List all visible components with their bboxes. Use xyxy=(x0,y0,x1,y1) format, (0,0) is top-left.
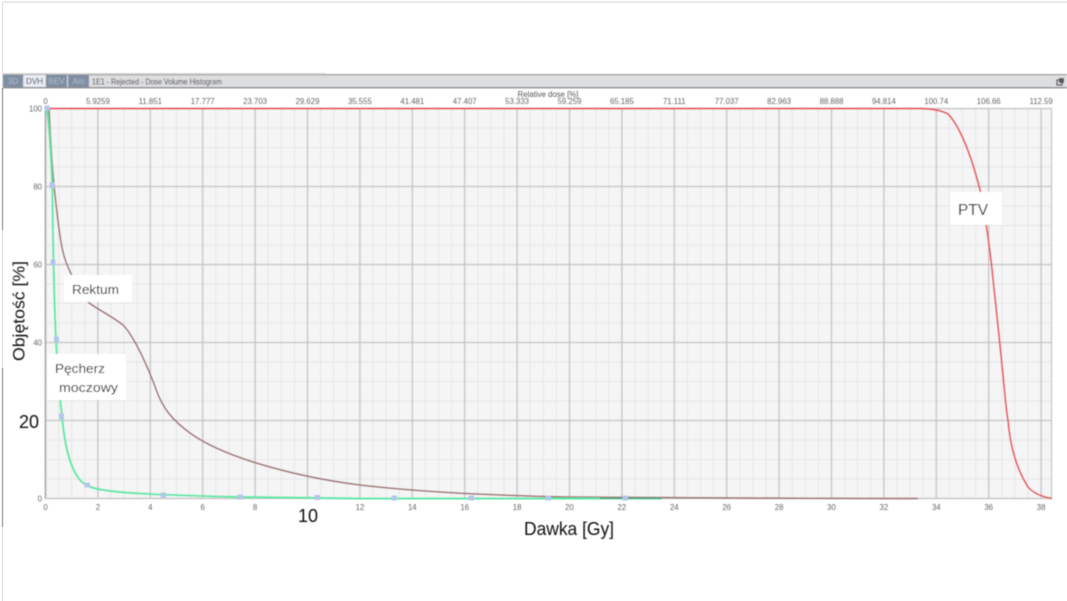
bottom axis labels: 24 xyxy=(670,503,679,512)
bottom axis labels: 34 xyxy=(932,503,941,512)
window title bar xyxy=(3,74,1067,88)
bottom axis labels xyxy=(43,503,1045,512)
top axis labels: 100.74 xyxy=(924,97,949,106)
bladder curve dark end segment xyxy=(600,498,662,500)
top axis labels: 47.407 xyxy=(453,97,477,106)
top axis labels: 94.814 xyxy=(872,97,896,106)
bottom axis labels: 18 xyxy=(513,503,521,512)
rectum label: Rektum xyxy=(72,282,119,297)
top axis labels: 0 xyxy=(43,97,48,106)
bladder curve markers xyxy=(44,106,628,500)
bottom axis labels: 20 xyxy=(565,503,574,512)
window title bar: DVH xyxy=(26,77,43,86)
bottom axis labels: 28 xyxy=(775,503,783,512)
bottom axis labels: 30 xyxy=(827,503,836,512)
bottom axis labels: 16 xyxy=(460,503,469,512)
window title bar: BEV xyxy=(48,77,65,86)
top axis labels: 82.963 xyxy=(767,97,791,106)
chart screenshot xyxy=(3,74,1067,539)
bottom axis labels: 36 xyxy=(984,503,993,512)
top axis labels: 53.333 xyxy=(505,97,529,106)
bottom axis labels: 2 xyxy=(96,503,100,512)
top axis labels xyxy=(43,97,1053,106)
bottom axis labels: 4 xyxy=(148,503,153,512)
top axis labels: 112.59 xyxy=(1029,97,1053,106)
left axis labels: 100 xyxy=(29,104,43,114)
top axis labels: 29.629 xyxy=(296,97,319,106)
bottom axis labels: 32 xyxy=(880,503,888,512)
PTV label: PTV xyxy=(958,202,988,219)
top axis labels: 77.037 xyxy=(715,97,739,106)
left axis labels: 40 xyxy=(33,338,43,348)
rectum label xyxy=(64,275,132,302)
window title bar: Arc xyxy=(72,77,84,86)
top axis labels: 59.259 xyxy=(558,97,581,106)
bottom axis labels: 6 xyxy=(201,503,205,512)
y axis value 20: 20 xyxy=(19,411,39,432)
top axis labels: 106.66 xyxy=(977,97,1001,106)
top axis labels: 35.555 xyxy=(348,97,372,106)
bladder label: moczowy xyxy=(59,380,119,395)
left axis labels: 0 xyxy=(38,494,43,504)
left axis labels: 80 xyxy=(33,182,43,192)
rectum dose curve xyxy=(49,108,918,498)
bladder label: Pęcherz xyxy=(55,361,105,376)
x axis title: Dawka [Gy] xyxy=(524,519,614,539)
top axis labels: 5.9259 xyxy=(86,97,110,106)
top axis labels: 41.481 xyxy=(400,97,424,106)
top axis title: relative dose: Relative dose [%] xyxy=(518,90,578,99)
left axis labels: 60 xyxy=(33,260,43,270)
bottom axis labels: 26 xyxy=(722,503,731,512)
y axis title: Objętość [%] xyxy=(10,261,28,361)
x axis value 10: 10 xyxy=(298,505,318,526)
top axis labels: 11.851 xyxy=(139,97,162,106)
bladder dose curve xyxy=(47,108,600,498)
left axis labels xyxy=(29,104,43,504)
bottom axis labels: 12 xyxy=(356,503,364,512)
top axis labels: 71.111 xyxy=(663,97,686,106)
bottom axis labels: 8 xyxy=(253,503,257,512)
window title bar: 3D xyxy=(8,77,18,86)
bladder label xyxy=(47,354,126,400)
top axis labels: 23.703 xyxy=(243,97,267,106)
top axis labels: 17.777 xyxy=(191,97,215,106)
bottom axis labels: 14 xyxy=(408,503,417,512)
window title bar: 1E1 - Rejected - Dose Volume Histogram xyxy=(92,76,222,86)
top axis labels: 65.185 xyxy=(610,97,634,106)
bottom axis labels: 0 xyxy=(43,503,48,512)
top axis labels: 88.888 xyxy=(820,97,843,106)
chart plot area with grid xyxy=(45,108,1052,499)
PTV dose curve xyxy=(49,109,1052,498)
bottom axis labels: 38 xyxy=(1037,503,1045,512)
PTV label xyxy=(950,192,1002,225)
bottom axis labels: 22 xyxy=(618,503,626,512)
